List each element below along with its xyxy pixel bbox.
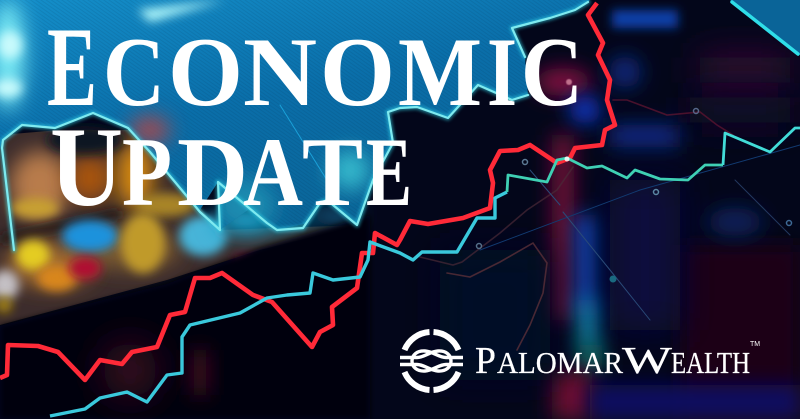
title line: Update: U [50,105,123,230]
chart: faint background traces [280,79,800,350]
title line: Economic: I [487,18,517,127]
chart: red rising line [0,3,615,380]
title line: Update: D [177,118,248,227]
logo wordmark: EALTH [671,345,750,380]
title line: Economic: E [47,5,97,130]
title line: Update: T [302,118,363,227]
title line: Economic: M [398,18,482,127]
title line: Economic: O [168,18,243,127]
title line: Economic: O [320,18,395,127]
icon: ring and knot emblem [400,332,463,390]
logo wordmark: ALOMAR [497,345,623,380]
chart: cyan upper line [2,2,798,250]
title line: Economic: C [103,18,165,127]
title line: Economic: C [521,18,583,127]
chart: cyan-green lower line [50,128,800,416]
logo wordmark: W [622,340,672,382]
title line: Update [50,105,412,230]
title line: Update: A [243,118,303,227]
background: blurred orange and blue lights on the left [0,126,370,419]
panel: blue hatched chart area [0,0,800,240]
logo wordmark: P [475,340,496,382]
logo: Palomar Wealth [400,332,760,390]
background: blurred colour lights on the right [440,10,800,419]
title line: Update: P [122,118,172,227]
trademark mark: TM [750,341,760,348]
title line: Economic: N [243,18,317,127]
title line: Update: E [366,118,412,227]
title line: Economic [47,5,583,130]
